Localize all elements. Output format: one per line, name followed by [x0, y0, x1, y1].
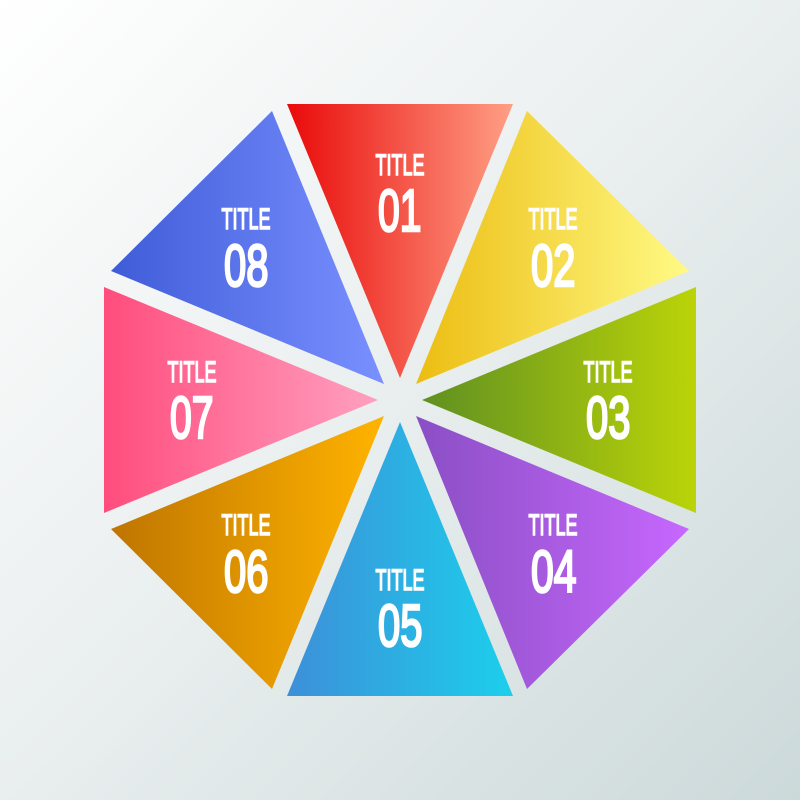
- segment 01: 01: [378, 178, 422, 244]
- segment 01: TITLE: [376, 149, 424, 182]
- segment 08: TITLE: [222, 203, 270, 236]
- segment 05: 05: [378, 593, 422, 659]
- segment 06: 06: [224, 539, 268, 605]
- segment 08: [111, 111, 384, 384]
- segment 04: 04: [531, 539, 576, 605]
- segment 05: TITLE: [376, 564, 424, 597]
- segment 01: [287, 104, 513, 378]
- segment 04: TITLE: [528, 509, 578, 542]
- segment 03: [422, 287, 696, 513]
- segment 08: 08: [224, 233, 268, 299]
- segment 07: TITLE: [168, 356, 216, 389]
- segment 02: [416, 111, 689, 384]
- segment 03: 03: [586, 385, 630, 451]
- segment 02: TITLE: [528, 203, 578, 236]
- segment 07: [104, 287, 378, 513]
- segment 04: [416, 416, 689, 689]
- segment 05: [287, 422, 513, 696]
- segment 03: TITLE: [584, 356, 632, 389]
- segment 06: TITLE: [222, 509, 270, 542]
- segment 07: 07: [170, 385, 214, 451]
- segment 02: 02: [531, 233, 576, 299]
- segment 06: [111, 416, 384, 689]
